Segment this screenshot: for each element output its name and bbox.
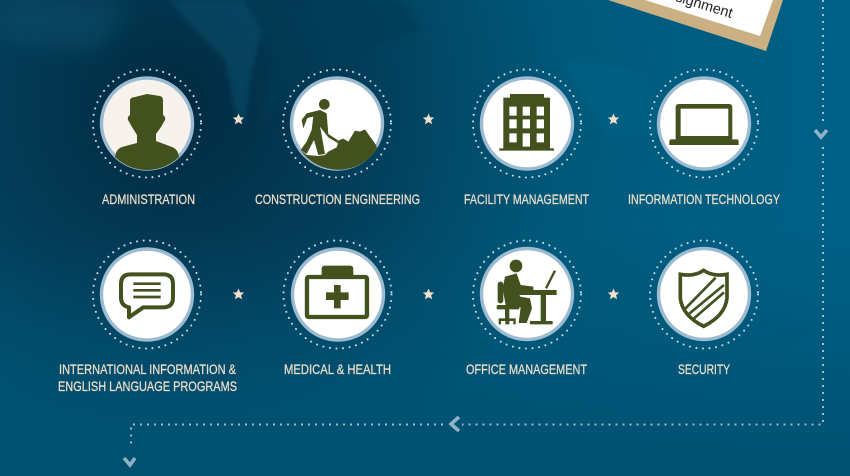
- label: office management: OFFICE MANAGEMENT: [466, 361, 587, 377]
- item: office management: [466, 240, 587, 377]
- label: security: SECURITY: [678, 361, 730, 377]
- item: security: [650, 240, 758, 377]
- item: medical and health: [284, 240, 392, 377]
- label: english language programs: ENGLISH LANGUAGE PROGRAMS: [58, 378, 237, 394]
- icon: laptop: [669, 104, 739, 145]
- label: facility management: FACILITY MANAGEMENT: [464, 191, 589, 207]
- star separators: [233, 114, 619, 299]
- item: administration: [93, 70, 201, 207]
- label: administration: ADMINISTRATION: [102, 191, 195, 207]
- item: international information: [58, 240, 237, 394]
- label: medical and health: MEDICAL & HEALTH: [284, 361, 391, 377]
- label: information technology: INFORMATION TECHNOLOGY: [628, 191, 781, 207]
- card: assignment note: [608, 0, 783, 51]
- label: construction engineering: CONSTRUCTION ENGINEERING: [255, 191, 420, 207]
- icon: speech bubble: [121, 274, 173, 317]
- label: international information: INTERNATIONAL INFORMATION &: [59, 361, 237, 377]
- icon: person: [115, 94, 179, 170]
- icon: first aid kit: [307, 266, 367, 317]
- item: facility management: [464, 70, 589, 207]
- icon: person at desk: [497, 260, 557, 324]
- item: information technology: [628, 70, 781, 207]
- item: construction engineering: [255, 70, 420, 207]
- icon: worker shovelling: [301, 99, 377, 170]
- icon: shield: [680, 270, 727, 326]
- icon: building: [499, 94, 554, 151]
